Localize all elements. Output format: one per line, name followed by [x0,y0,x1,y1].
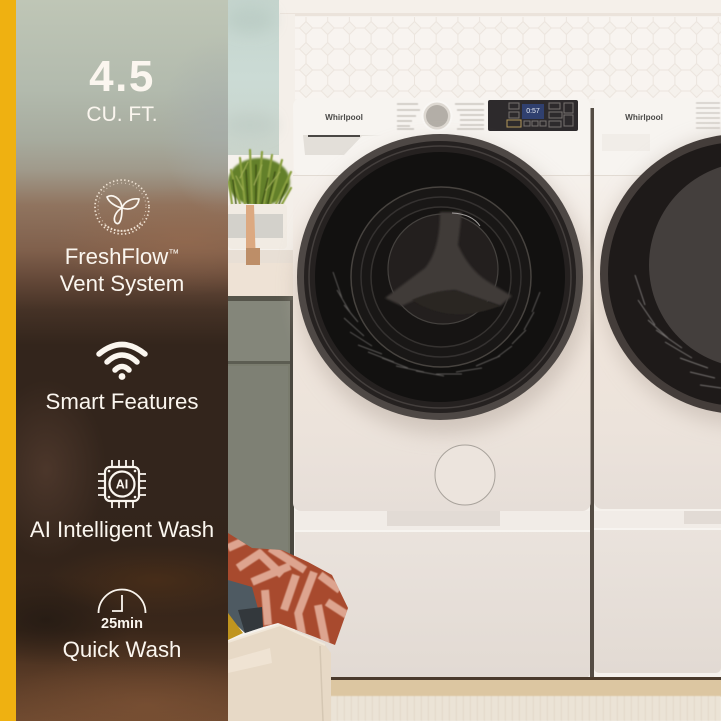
icon: wifi [96,342,148,380]
window [224,0,279,155]
main pedestal [295,511,590,678]
icon: AI chip: AI [116,478,128,492]
capacity unit: CU. FT. [86,103,158,126]
main washer: 0:57 [526,108,540,115]
icon: fan in dotted circle [94,179,150,235]
divider gap between washers [590,108,594,680]
counter and cabinet [228,250,294,556]
laundry room photo scene [228,0,721,721]
plant in pot [228,150,291,265]
cycle dial [422,102,452,130]
display panel [488,100,578,131]
label: Smart Features: Smart Features [46,389,198,414]
label: FreshFlow: FreshFlow™ [65,244,179,269]
door latch circle [435,445,495,505]
second washer [594,98,721,673]
basket handle [228,648,272,673]
icon: AI chip [98,460,146,508]
label: Quick Wash: Quick Wash [63,637,181,662]
door [297,134,583,420]
label: Vent System: Vent System [60,271,184,296]
yellow accent bar [0,0,16,721]
yellow garment [228,613,243,640]
door shadow [297,142,589,434]
washer body [293,98,590,511]
laundry basket [228,533,348,721]
towel [228,533,348,645]
floor and rug [330,677,721,721]
second washer: Whirlpool [625,113,663,122]
blue garment [228,580,263,633]
detergent drawer [303,135,382,155]
drum paddle [385,212,512,306]
glass swirl [333,272,540,376]
cycle labels [397,104,484,129]
capacity number: 4.5 [89,52,155,101]
basket body [228,625,331,721]
drum [351,187,531,367]
icon: quick wash timer [98,588,146,630]
label: AI Intelligent Wash: AI Intelligent Wash [30,517,214,542]
main washer [293,98,590,511]
control panel: brand: Whirlpool [325,113,363,122]
side panel background [16,0,228,721]
